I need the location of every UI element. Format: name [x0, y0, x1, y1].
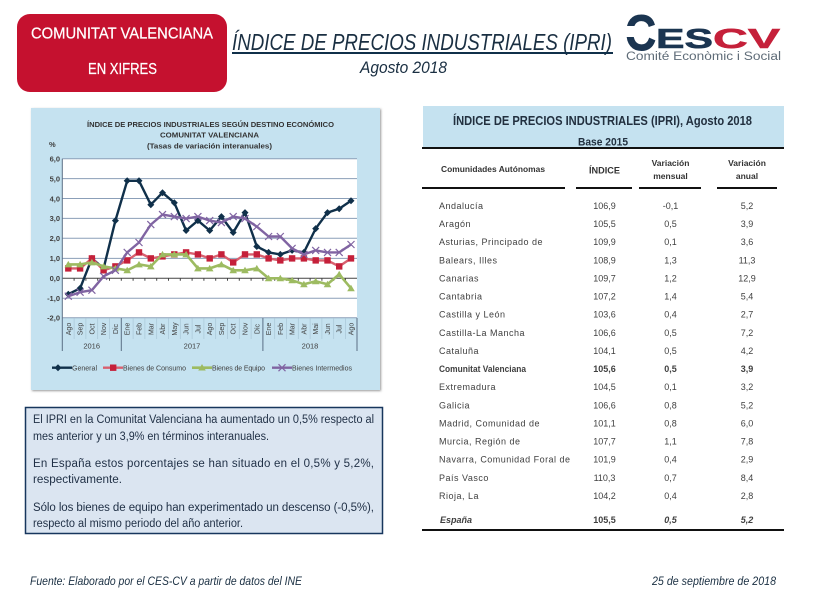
x axis month labels: Ene	[125, 323, 132, 335]
row: Andalucía: -0,1	[663, 201, 678, 211]
row: Castilla y León: 103,6	[593, 310, 616, 320]
row: España total: 0,5	[664, 515, 678, 525]
row: Galicia: 5,2	[741, 400, 753, 410]
row: Canarias: 109,7	[593, 274, 616, 284]
row: Andalucía: 5,2	[741, 201, 753, 211]
table heading: ÍNDICE DE PRECIOS INDUSTRIALES (IPRI), Agosto 2018	[453, 113, 752, 128]
row: Navarra: Navarra, Comunidad Foral de	[439, 455, 570, 465]
y axis labels: %	[49, 140, 56, 149]
row: Asturias: 3,6	[741, 237, 753, 247]
row: Cataluña: 4,2	[741, 346, 753, 356]
chart title: COMUNITAT VALENCIANA	[160, 130, 260, 140]
row: Cataluña	[439, 346, 753, 356]
x axis year labels: 2016	[83, 342, 100, 350]
row: Navarra: 101,9	[593, 455, 616, 465]
row: Balears: 11,3	[739, 255, 755, 265]
logo: CESCV: CV	[713, 23, 781, 54]
chart title: (Tasas de variación interanuales)	[147, 142, 273, 150]
row: Galicia: 106,6	[593, 400, 616, 410]
row: Madrid: 101,1	[593, 418, 616, 428]
row: Cataluña: 0,5	[664, 346, 677, 356]
x axis year labels: 2018	[302, 342, 318, 350]
series: General	[68, 181, 351, 294]
series: Bienes Intermedios	[68, 215, 351, 296]
y axis labels: 3,0	[50, 214, 60, 223]
row: País Vasco	[439, 473, 753, 483]
plot area	[62, 159, 357, 351]
row: Madrid: Madrid, Comunidad de	[439, 418, 540, 428]
row: Balears: 108,9	[593, 255, 616, 265]
x axis month labels: Jul	[337, 324, 344, 333]
y axis labels: -2,0	[47, 314, 60, 322]
x axis year labels	[83, 342, 318, 350]
row: Murcia: 107,7	[593, 437, 616, 447]
footer: date: 25 de septiembre de 2018	[651, 574, 776, 588]
row: Murcia	[439, 437, 753, 447]
x axis month labels: Oct	[89, 324, 96, 334]
x axis month labels: Mar	[290, 322, 297, 335]
x axis month labels: Feb	[278, 323, 285, 335]
text block: commentary: Sólo los bienes de equipo han experimentado un descenso (-0,5%),	[33, 502, 374, 514]
legend	[52, 364, 352, 372]
subtitle: date: Agosto 2018	[359, 58, 447, 77]
row: Navarra: 2,9	[741, 455, 753, 465]
row: Aragón: 3,9	[741, 219, 753, 229]
x axis month labels: Dic	[254, 323, 261, 334]
row: Balears: Balears, Illes	[439, 255, 498, 265]
series: Bienes de Consumo	[68, 252, 351, 270]
badge: Comunitat Valenciana en xifres: EN XIFRES	[88, 61, 157, 78]
row: Canarias: 1,2	[664, 274, 677, 284]
x axis month labels: Abr	[160, 323, 167, 334]
x axis month labels: Ago	[207, 323, 214, 335]
x axis month labels: Ene	[266, 323, 273, 335]
y axis labels: 5,0	[50, 174, 60, 184]
row: Aragón: Aragón	[439, 219, 471, 229]
row: Comunitat Valenciana: 105,6	[593, 364, 616, 374]
x axis month labels: Abr	[301, 323, 308, 334]
logo: CESCV	[624, 5, 781, 63]
row: Extremadura: 3,2	[741, 382, 753, 392]
row: Murcia: Murcia, Región de	[439, 437, 521, 447]
footer: source: Fuente: Elaborado por el CES-CV a partir de datos del INE	[30, 574, 303, 588]
row: Madrid: 6,0	[741, 418, 753, 428]
row: Castilla-La Mancha	[439, 328, 753, 338]
row: España total	[440, 515, 753, 525]
row: Castilla y León: Castilla y León	[439, 310, 506, 320]
row: Cantabria: 5,4	[741, 292, 753, 302]
chart title: ÍNDICE DE PRECIOS INDUSTRIALES SEGÚN DESTINO ECONÓMICO	[87, 120, 334, 129]
y axis labels: 0,0	[50, 274, 60, 283]
column headers: anual	[736, 171, 758, 181]
row: Asturias	[439, 237, 753, 247]
badge: Comunitat Valenciana en xifres	[17, 14, 227, 92]
logo: CESCV: C	[625, 5, 656, 61]
row: Comunitat Valenciana: 3,9	[741, 364, 753, 374]
row: Andalucía	[439, 201, 753, 211]
row: Cantabria: 107,2	[593, 292, 616, 302]
row: Rioja: Rioja, La	[439, 491, 479, 501]
x axis month labels: Jun	[325, 323, 332, 335]
row: Canarias	[439, 274, 756, 284]
column headers	[422, 158, 777, 188]
row: Galicia: Galicia	[439, 400, 470, 410]
text block: commentary: respecto al mismo periodo del año anterior.	[33, 518, 243, 530]
row: España total: 5,2	[741, 515, 753, 525]
column headers: Variación	[652, 158, 689, 168]
row: Extremadura	[439, 382, 753, 392]
table heading: Base 2015	[578, 136, 628, 148]
panel: table	[422, 106, 784, 531]
x axis month labels: Jul	[195, 324, 202, 333]
row: Andalucía: 106,9	[593, 201, 616, 211]
row: Murcia: 7,8	[741, 437, 753, 447]
row: Cantabria: 1,4	[664, 292, 677, 302]
x axis month labels: Ago	[66, 323, 73, 335]
panel: line chart	[31, 108, 380, 390]
row: Galicia: 0,8	[664, 400, 677, 410]
row: Comunitat Valenciana: 0,5	[664, 364, 677, 374]
series: Bienes de Equipo	[68, 254, 351, 288]
row: País Vasco: País Vasco	[439, 473, 489, 483]
row: Cantabria: Cantabria	[439, 292, 483, 302]
y axis labels: 1,0	[50, 254, 60, 263]
chart title	[87, 120, 334, 150]
row: Navarra: 0,4	[664, 455, 677, 465]
x axis month labels: Mar	[148, 322, 155, 335]
text block: commentary	[26, 408, 382, 534]
row: Comunitat Valenciana: Comunitat Valenciana	[439, 364, 527, 374]
row: Extremadura: Extremadura	[439, 382, 496, 392]
badge: Comunitat Valenciana en xifres: COMUNITAT VALENCIANA	[31, 26, 213, 42]
table heading	[422, 106, 784, 149]
row: Aragón: 105,5	[593, 219, 616, 229]
y axis labels: 4,0	[50, 194, 60, 203]
x axis year labels: 2017	[184, 342, 200, 350]
row: Castilla y León	[439, 310, 753, 320]
column headers: mensual	[653, 171, 688, 181]
x axis month labels: Sep	[219, 323, 226, 335]
legend: Bienes de Consumo	[123, 366, 186, 372]
row: Comunitat Valenciana	[439, 364, 753, 374]
y axis labels: 2,0	[50, 234, 60, 243]
logo: CESCV: ES	[656, 23, 713, 54]
row: Cantabria	[439, 292, 753, 302]
row: Asturias: 0,1	[664, 237, 677, 247]
row: Extremadura: 104,5	[593, 382, 616, 392]
y axis labels	[47, 140, 60, 322]
title: ÍNDICE DE PRECIOS INDUSTRIALES (IPRI)	[232, 29, 612, 55]
row: Castilla-La Mancha: 106,6	[593, 328, 616, 338]
x axis month labels: Dic	[113, 323, 120, 334]
row: Andalucía: Andalucía	[439, 201, 484, 211]
x axis month labels: Nov	[242, 322, 250, 335]
row: País Vasco: 110,3	[594, 473, 615, 483]
logo: CESCV: Comité Econòmic i Social	[626, 51, 781, 63]
x axis month labels	[66, 322, 356, 336]
row: Madrid	[439, 418, 753, 428]
row: Cataluña: 104,1	[593, 346, 616, 356]
row: Galicia	[439, 400, 753, 410]
x axis month labels: Oct	[231, 324, 238, 334]
x axis month labels: Nov	[101, 322, 108, 335]
text block: commentary: En España estos porcentajes se han situado en el 0,5% y 5,2%,	[33, 458, 374, 470]
row: Aragón: 0,5	[664, 219, 677, 229]
row: España total: España	[440, 515, 472, 525]
row: Castilla-La Mancha: Castilla-La Mancha	[439, 328, 525, 338]
row: Aragón	[439, 219, 753, 229]
row: Rioja: 104,2	[593, 491, 616, 501]
row: Asturias: 109,9	[593, 237, 616, 247]
y axis labels: 6,0	[50, 154, 60, 164]
x axis month labels: Jun	[184, 323, 191, 335]
row: Canarias: 12,9	[738, 274, 756, 284]
text block: commentary: respectivamente.	[33, 474, 122, 486]
row: Castilla-La Mancha: 7,2	[741, 328, 753, 338]
row: Balears: 1,3	[664, 255, 677, 265]
legend: General	[72, 366, 97, 372]
row: Balears	[439, 255, 755, 265]
column headers: Comunidades Autónomas	[441, 164, 545, 174]
row: Asturias: Asturias, Principado de	[439, 237, 543, 247]
row: Murcia: 1,1	[664, 437, 677, 447]
text block: commentary: mes anterior y un 3,9% en términos interanuales.	[33, 431, 269, 443]
text block: commentary: El IPRI en la Comunitat Valenciana ha aumentado un 0,5% respecto al	[33, 414, 374, 426]
row: Navarra	[439, 455, 753, 465]
row: Rioja: 2,8	[741, 491, 753, 501]
column headers: Variación	[728, 158, 766, 168]
x axis month labels: Mai	[313, 323, 320, 335]
row: Rioja	[439, 491, 753, 501]
legend: Bienes Intermedios	[292, 366, 352, 372]
row: Madrid: 0,8	[664, 418, 677, 428]
x axis month labels: Feb	[136, 323, 144, 335]
x axis month labels: Ago	[348, 323, 356, 335]
row: Castilla-La Mancha: 0,5	[664, 328, 677, 338]
row: España total: 105,5	[593, 515, 616, 525]
row: Cataluña: Cataluña	[439, 346, 479, 356]
row: Rioja: 0,4	[664, 491, 677, 501]
legend: Bienes de Equipo	[212, 366, 265, 372]
y axis labels: -1,0	[47, 294, 60, 303]
row: Castilla y León: 2,7	[741, 310, 753, 320]
row: Extremadura: 0,1	[664, 382, 677, 392]
row: País Vasco: 8,4	[741, 473, 753, 483]
row: País Vasco: 0,7	[664, 473, 677, 483]
x axis month labels: Sep	[78, 323, 85, 335]
column headers: ÍNDICE	[589, 166, 620, 176]
row: Canarias: Canarias	[439, 274, 479, 284]
x axis month labels: May	[172, 322, 179, 336]
row: Castilla y León: 0,4	[664, 310, 677, 320]
